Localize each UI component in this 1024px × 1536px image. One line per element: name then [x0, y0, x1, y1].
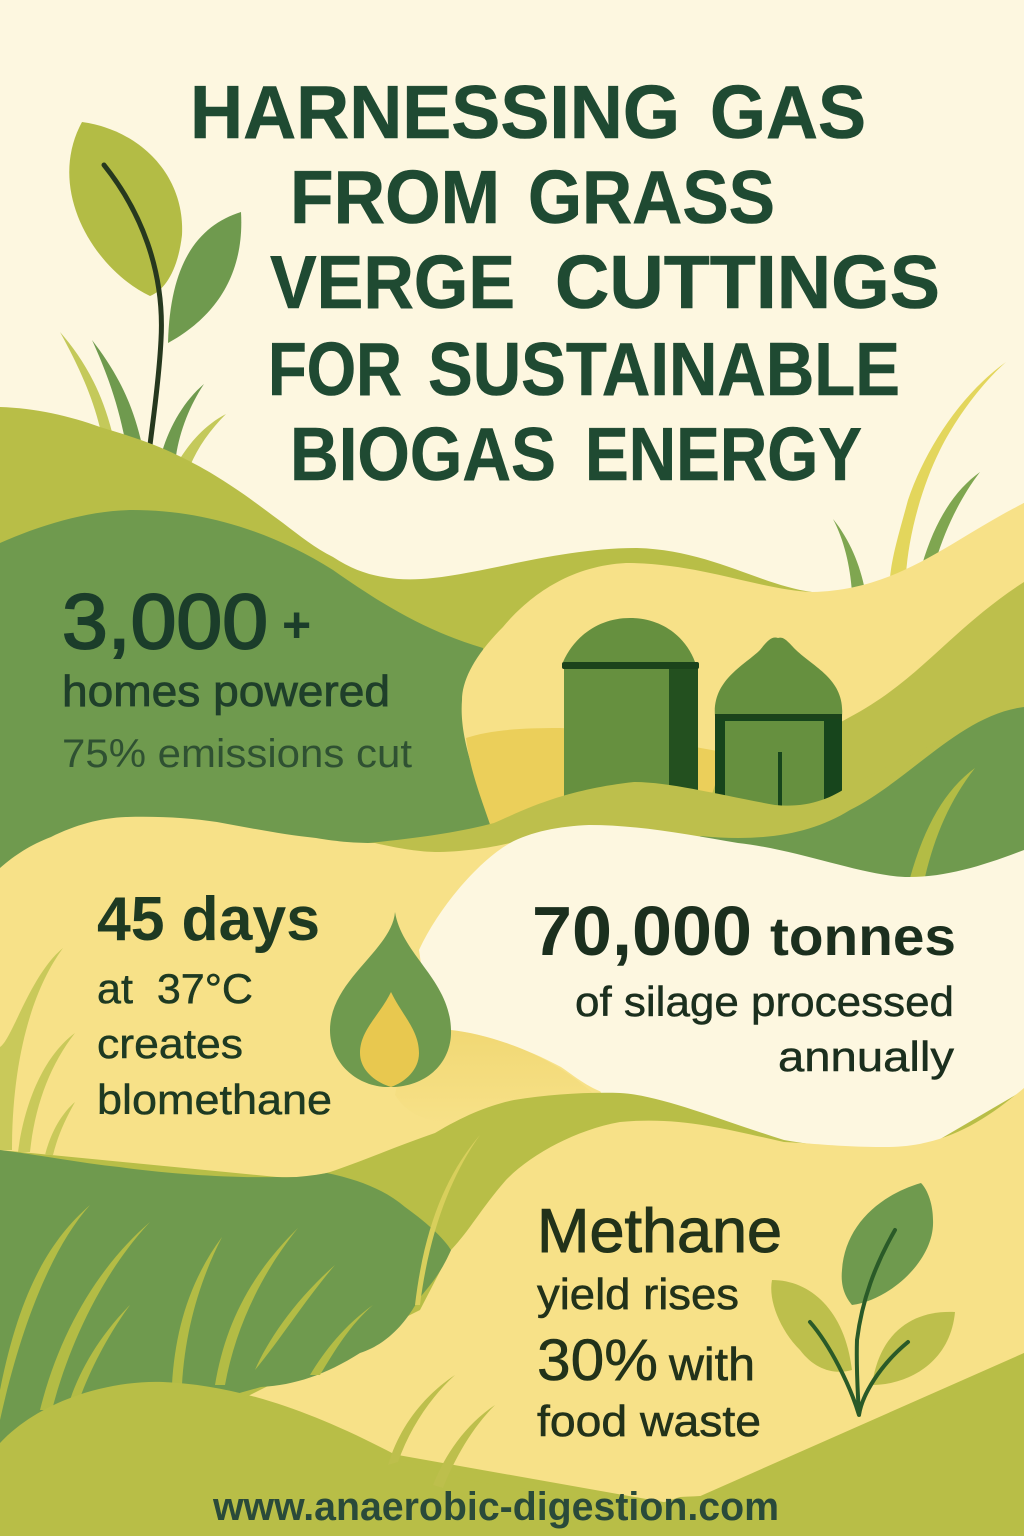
hill: green lower-left field	[0, 1150, 451, 1460]
icon: top-right grass	[833, 362, 1006, 592]
stat: silage processed: annually	[778, 1033, 954, 1080]
stat: methane yield: with	[668, 1338, 755, 1390]
hill: lower right yellow	[200, 1088, 1024, 1505]
title: GRASS	[528, 155, 775, 239]
stat: homes powered and emissions cut: +	[282, 597, 311, 653]
stat: 45 days digestion	[97, 885, 332, 1123]
title: ENERGY	[585, 412, 862, 496]
stat: 45 days digestion: blomethane	[97, 1076, 332, 1123]
stat: homes powered and emissions cut: 75% emissions cut	[62, 732, 412, 776]
icon: lower grass blades	[388, 1375, 495, 1488]
title: VERGE	[270, 240, 515, 324]
icon: green field grass blades	[0, 1135, 480, 1420]
stat: silage processed: tonnes	[770, 907, 956, 967]
hill: green right field	[700, 707, 1024, 900]
title: FOR	[268, 327, 402, 411]
hill: top olive band	[0, 407, 1024, 900]
stat: methane yield: food waste	[537, 1397, 761, 1446]
stat: methane yield: yield rises	[537, 1270, 739, 1319]
icon: biomethane flame	[330, 912, 451, 1087]
hill: left yellow meadow	[0, 817, 640, 1200]
title	[190, 70, 940, 496]
stat: homes powered and emissions cut	[62, 577, 412, 776]
title: CUTTINGS	[555, 240, 940, 324]
stat: 45 days digestion: 45 days	[97, 885, 320, 954]
icon: grass blade in green field	[910, 768, 975, 878]
stat: homes powered and emissions cut: 3,000	[62, 577, 268, 665]
stat: 45 days digestion: at 37°C	[97, 965, 253, 1012]
hill: bottom-right olive slope	[560, 1353, 1024, 1536]
stat: silage processed: 70,000	[532, 892, 752, 970]
stat: 45 days digestion: creates	[97, 1020, 243, 1067]
hill: olive band above lower yellow	[0, 1090, 1024, 1536]
hill: green left field	[0, 510, 500, 880]
stat: methane yield: 30%	[537, 1328, 658, 1393]
stat: homes powered and emissions cut: homes powered	[62, 667, 390, 716]
panel: cream ribbon	[419, 825, 1024, 1148]
title: GAS	[710, 70, 866, 154]
hill: olive strip under silos	[368, 700, 1024, 900]
title: FROM	[290, 155, 500, 239]
icon: top-left sprout	[60, 122, 241, 466]
icon: left meadow grass blades	[0, 948, 75, 1155]
title: HARNESSING	[190, 70, 680, 154]
stat: methane yield	[537, 1197, 782, 1446]
icon: biogas silos	[562, 618, 842, 821]
hill: darker yellow patch	[395, 1030, 600, 1124]
title: BIOGAS	[290, 412, 556, 496]
hill: yellow blob behind silos	[462, 503, 1024, 830]
title: SUSTAINABLE	[428, 327, 900, 411]
website url: www.anaerobic-digestion.com	[212, 1485, 779, 1529]
stat: silage processed: of silage processed	[575, 978, 954, 1025]
hill: right olive slope	[700, 582, 1024, 830]
hill: bottom-left olive mound	[0, 1382, 700, 1536]
hill: deep yellow ground	[466, 728, 760, 830]
icon: bottom-right plant	[771, 1183, 955, 1415]
stat: methane yield: Methane	[537, 1197, 782, 1266]
stat: silage processed	[532, 892, 956, 1080]
